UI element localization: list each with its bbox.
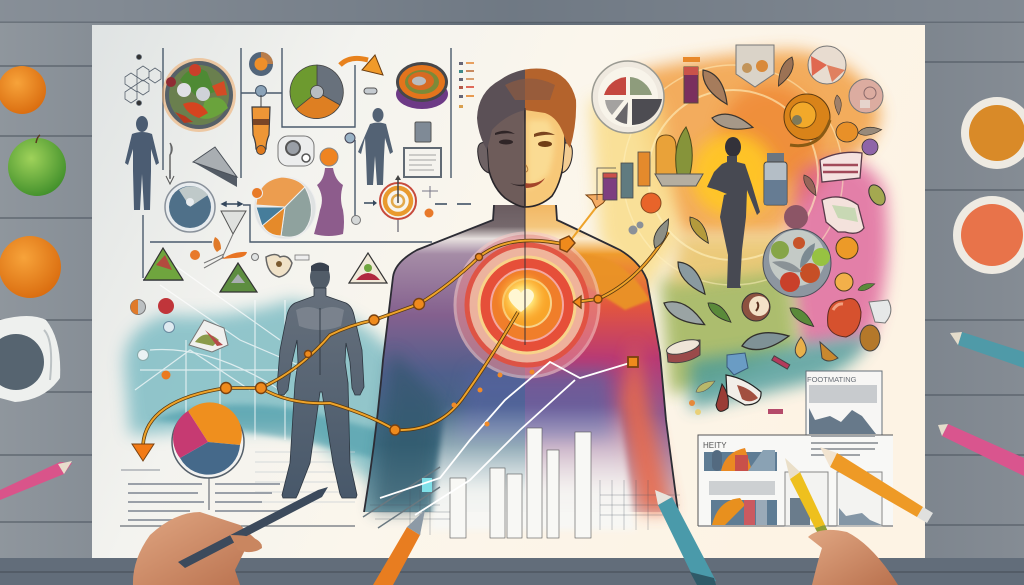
icon: chat food card <box>822 197 864 233</box>
icon: mesh shape <box>869 300 891 323</box>
pie chart lower left <box>172 402 244 478</box>
icon: clipboard document <box>404 148 441 177</box>
text lines block left <box>120 470 355 526</box>
target rings on chest <box>455 233 599 377</box>
coral cup <box>953 196 1024 274</box>
grey band <box>809 385 877 403</box>
bar chart at figure base <box>450 428 591 538</box>
icon: salad plate <box>162 58 236 132</box>
color tick legend <box>459 62 474 108</box>
figure: left standing silhouette <box>125 116 159 210</box>
icon: dress form <box>314 148 344 236</box>
icon: wedge slice <box>193 147 237 187</box>
orange pencil <box>820 447 933 523</box>
needle lines and cyan square <box>363 467 440 528</box>
small panels <box>785 436 882 526</box>
icon: red apple <box>828 298 861 337</box>
glowing heart <box>496 271 550 325</box>
orange top <box>0 66 46 114</box>
document panel: lower report <box>698 435 893 527</box>
desk items right <box>938 97 1024 476</box>
icon: node <box>256 86 266 96</box>
torso outline <box>364 205 678 512</box>
ear left <box>478 142 489 173</box>
icon: fruit bowl <box>763 229 831 297</box>
yellow pencil <box>785 458 852 585</box>
icon: gauge dial <box>165 182 215 232</box>
white cup <box>0 316 60 402</box>
icon: food card <box>189 320 228 352</box>
white trend line with dots <box>380 357 638 515</box>
icon: green nut <box>865 182 889 208</box>
icon: small box <box>415 122 431 142</box>
icon: halved apple <box>742 293 770 321</box>
desk fruits and cups left <box>0 66 72 500</box>
icon: spiral target <box>380 175 416 232</box>
arrow head: upper right pointer <box>586 194 610 208</box>
orange pen bottom <box>373 510 425 585</box>
watercolor splash right <box>590 50 888 410</box>
icon: shield badge <box>736 45 774 87</box>
icon: coconut drum <box>665 337 701 363</box>
icon: orange ball <box>249 52 273 76</box>
icon: crystal <box>727 353 748 375</box>
icon: spoon arrow <box>166 143 174 184</box>
grey band <box>709 481 775 495</box>
icon: fig <box>860 325 880 351</box>
pink pencil left <box>0 461 72 500</box>
document label: HEITY <box>703 441 727 450</box>
orange lower <box>0 236 61 298</box>
figure: standing man <box>277 262 364 498</box>
icon: inverted triangle <box>221 211 246 258</box>
path nodes <box>220 236 602 435</box>
orange progress path <box>143 232 668 445</box>
icon: shell food <box>716 375 761 411</box>
pink pencil <box>938 424 1024 476</box>
arrow head: down triangle <box>132 444 154 461</box>
figure: woman in black <box>707 137 760 288</box>
icon: nut <box>266 254 292 277</box>
small node with line <box>345 133 360 224</box>
icons: small bar chart right <box>597 152 650 200</box>
blue pencil <box>655 490 716 585</box>
icon: layered bowl <box>396 62 448 109</box>
flow chart connector lines <box>143 48 451 280</box>
triangle food icons <box>144 248 387 292</box>
pie chart: green grey orange <box>290 65 343 119</box>
icon: circle diagram <box>849 79 883 113</box>
small arrows and orange dot <box>364 186 471 218</box>
leaf group mid right <box>650 214 876 353</box>
icon: berries <box>628 222 644 234</box>
leaf group upper right <box>698 55 882 198</box>
small leaf and dots <box>689 378 783 415</box>
icon: test tube <box>683 57 700 103</box>
green apple <box>8 135 66 196</box>
stacked shapes chart top <box>704 448 777 471</box>
icon: herbs and scissors <box>190 237 258 268</box>
icon: orange slice <box>641 193 661 213</box>
hatch at figure base <box>370 480 680 535</box>
teal watercolor area left <box>124 262 460 502</box>
left face features <box>495 131 525 186</box>
document panel: top report <box>806 371 882 435</box>
icon: circle pie pale <box>808 46 846 84</box>
figure: woman silhouette small <box>358 108 393 185</box>
left ingredient icons <box>130 298 174 380</box>
hair <box>477 68 576 150</box>
pie chart: large multi colour <box>252 177 316 239</box>
teal pencil <box>950 332 1024 368</box>
icon: fig halves and pill <box>772 337 838 369</box>
arrow: curved orange <box>340 55 383 75</box>
icon: bottle <box>764 153 787 205</box>
icon: small capsule <box>364 88 377 94</box>
icon: swirl <box>784 94 830 146</box>
icon: arch and leaf planter <box>655 127 703 186</box>
arrow: double <box>222 202 242 206</box>
icon: food box <box>820 152 862 182</box>
left hand with pen <box>133 487 328 585</box>
stacked shapes chart bottom <box>711 498 777 525</box>
icon: citrus pieces <box>835 237 858 291</box>
icon: drink glass <box>252 95 270 154</box>
icon: molecule <box>125 54 161 106</box>
central neck and head <box>477 68 576 345</box>
icon: small fruits upper right <box>836 122 878 155</box>
area chart <box>809 408 876 434</box>
icon: ring pie chart <box>592 61 664 133</box>
right hand <box>808 530 898 585</box>
small capsule right of nut <box>295 255 309 260</box>
icon: magnifier <box>278 136 314 166</box>
right face features <box>525 132 555 188</box>
ear right <box>562 143 572 173</box>
paper sheet <box>92 25 925 558</box>
icon: plum <box>784 205 808 229</box>
document label: FOOTMATING <box>807 375 857 384</box>
central figure torso <box>364 205 678 530</box>
amber cup <box>961 97 1024 169</box>
